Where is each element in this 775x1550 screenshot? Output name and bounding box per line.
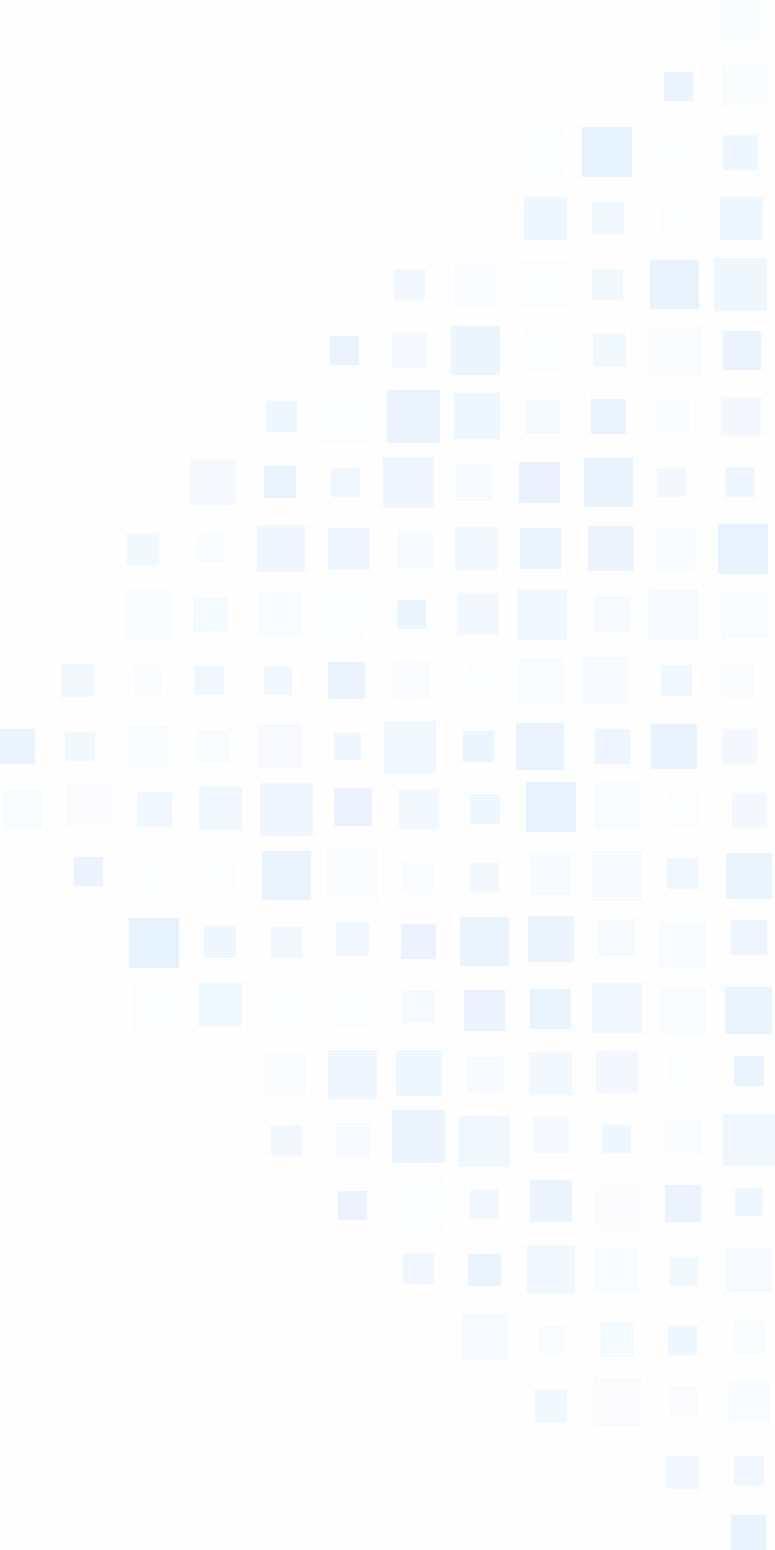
row of squares at y 1378-1426 [535, 1378, 770, 1426]
row of squares at y 916-968 [129, 916, 767, 968]
row of squares at y 1178-1230 [338, 1178, 763, 1230]
row of squares at y 1245-1293 [403, 1245, 772, 1293]
row of squares at y 197-240 [524, 197, 763, 240]
row of squares at y 849-901 [74, 849, 772, 901]
row of squares at y 1314-1360 [462, 1314, 765, 1360]
bottom square at y 1515 [731, 1515, 766, 1550]
row of squares at y 0-110 [664, 1, 766, 108]
row of squares at y 1050-1099 [266, 1050, 764, 1099]
row of squares at y 258-311 [394, 258, 767, 311]
row of squares at y 127-177 [521, 127, 758, 177]
row of squares at y 524-574 [127, 524, 768, 574]
row of squares at y 657-704 [61, 657, 755, 704]
row of squares at y 1110-1167 [271, 1110, 775, 1167]
row of squares at y 782-836 [3, 782, 767, 836]
row of squares at y 390-443 [266, 390, 761, 443]
row of squares at y 325-376 [330, 325, 761, 376]
row of squares at y 1456-1489 [666, 1456, 764, 1489]
row of squares at y 589-640 [124, 589, 768, 640]
row of squares at y 721-775 [0, 721, 757, 773]
row of squares at y 457-508 [190, 457, 755, 508]
row of squares at y 983-1034 [133, 983, 772, 1034]
